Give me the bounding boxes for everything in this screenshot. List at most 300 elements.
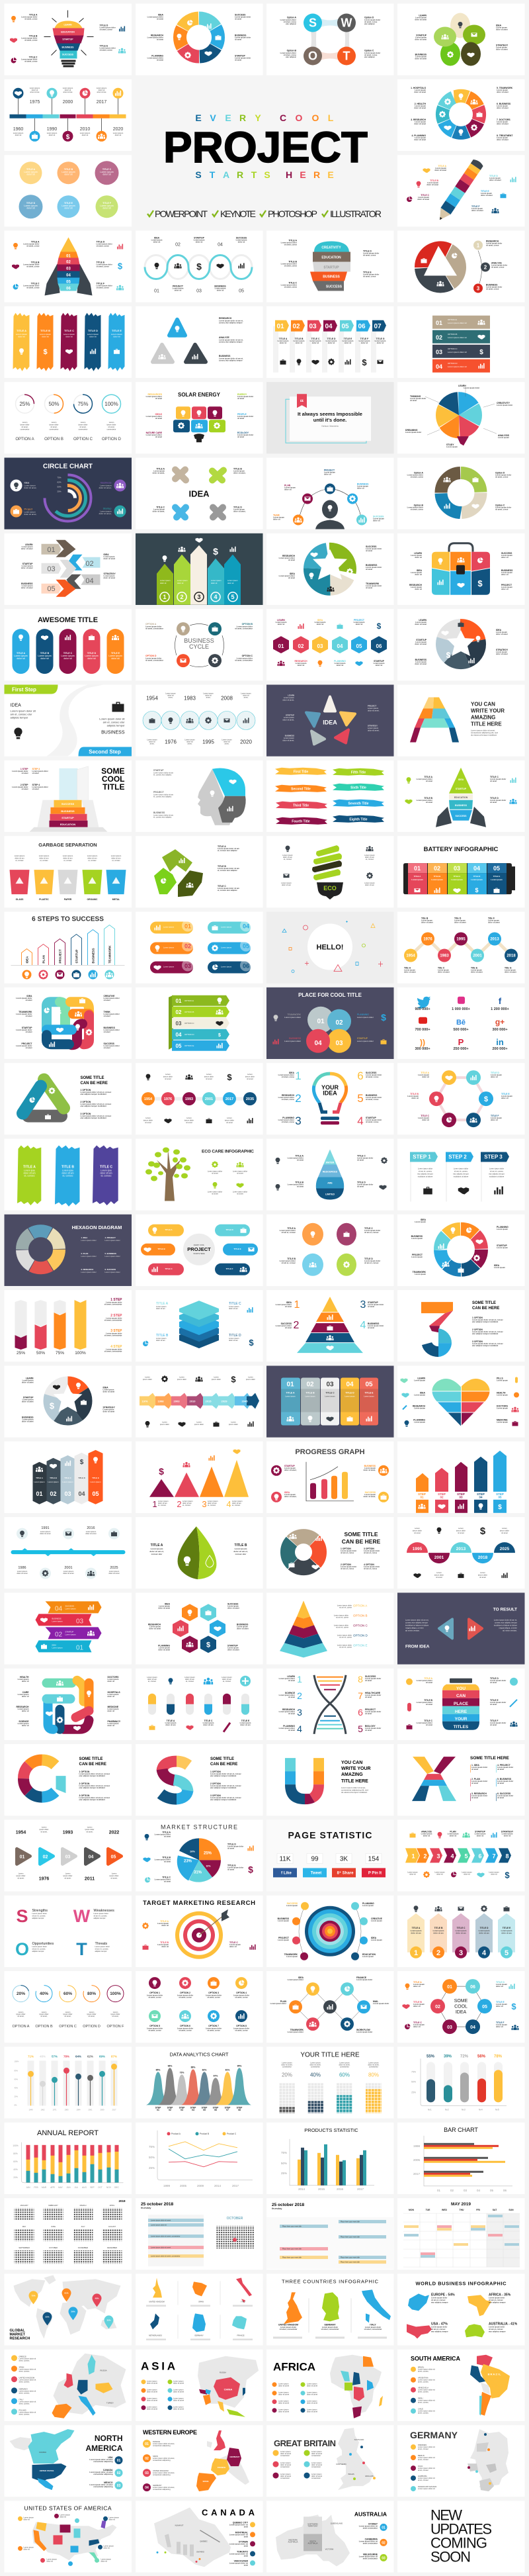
labels: TITLE C bbox=[288, 282, 297, 285]
numbers: 4 bbox=[297, 1724, 302, 1734]
labels: IDEA bbox=[421, 1219, 426, 1221]
steps: 01 bbox=[157, 2109, 159, 2111]
month: OCTOBER bbox=[227, 2217, 243, 2221]
heading: AUSTRALIA bbox=[354, 2510, 387, 2517]
values: consectetur bbox=[20, 428, 30, 431]
callouts: Lorem ipsum bbox=[24, 2516, 34, 2518]
options: Lorem ipsum dolor sit am et, consec bbox=[210, 1772, 241, 1775]
panel: timeline 1960-2020 bbox=[4, 79, 132, 151]
text: incididunt ut labore et dolore bbox=[405, 1624, 429, 1626]
labels: TITLE B bbox=[424, 797, 432, 800]
labels: dolor sit amet bbox=[103, 1410, 114, 1412]
legend: amet, consec bbox=[19, 2370, 30, 2373]
heading: IDEA bbox=[188, 488, 210, 499]
labels: TITLE C bbox=[102, 168, 111, 171]
panel: data analytics chart bbox=[136, 2047, 263, 2119]
text bbox=[411, 1927, 512, 1934]
text: incididunt ut labore bbox=[454, 1175, 469, 1178]
numbers: 02 bbox=[306, 1381, 314, 1389]
legend: Lorem ipsum bbox=[147, 2389, 157, 2391]
panel: line chart bbox=[136, 2123, 263, 2194]
legend: dolor sit amet bbox=[280, 2475, 291, 2477]
labels: dolor sit amet bbox=[454, 921, 466, 924]
nodes bbox=[292, 1902, 368, 1960]
years: Lorem ipsum bbox=[109, 1571, 119, 1573]
labels: Lorem ipsum bbox=[324, 471, 335, 474]
labels: dolor sit bbox=[504, 1834, 510, 1837]
arrow labels: TEAMWORK bbox=[108, 945, 111, 964]
side labels: Lorem ipsum dolor bbox=[284, 1016, 301, 1019]
axes and months: FEB bbox=[34, 2186, 38, 2189]
labels: UNITED KINGDOM bbox=[278, 2323, 298, 2326]
text: consec etur adipisic tempor bbox=[405, 1621, 428, 1624]
labels: sit am et, consec bbox=[281, 1231, 296, 1234]
chain bbox=[429, 1070, 493, 1127]
year circles bbox=[404, 932, 518, 962]
circle bbox=[307, 924, 352, 970]
labels: Lorem ipsum bbox=[434, 1871, 445, 1873]
labels: TITLE C bbox=[100, 1165, 112, 1169]
tags bbox=[4, 684, 132, 756]
labels: Lorem ipsum bbox=[497, 1420, 508, 1423]
labels: et, consec bbox=[232, 1504, 241, 1506]
titles: TITLE B bbox=[50, 1477, 57, 1479]
text: ad minim veniam. bbox=[405, 1629, 420, 1632]
years bbox=[142, 1399, 248, 1403]
values: 73% bbox=[180, 2071, 184, 2074]
values: ipsum dolor bbox=[79, 424, 88, 426]
labels: Lorem ipsum bbox=[103, 1408, 114, 1411]
text: Lorem ipsum dolor bbox=[104, 1239, 120, 1242]
labels: Lorem ipsum bbox=[427, 181, 439, 184]
side labels: TEAMWORK bbox=[287, 1013, 302, 1016]
labels: Lorem ipsum dolor bbox=[16, 1013, 32, 1015]
labels: sit amet bbox=[365, 1696, 372, 1698]
labels: dolor sit bbox=[501, 556, 509, 559]
icons bbox=[288, 1534, 322, 1569]
labels bbox=[281, 846, 376, 886]
labels: OPTION A bbox=[13, 2025, 30, 2029]
years: dolor sit bbox=[224, 740, 230, 743]
labels: sit amet, conse bbox=[284, 21, 297, 23]
icons and labels: TITLE A bbox=[29, 13, 37, 16]
labels: 4 bbox=[226, 1499, 231, 1509]
arrow tags bbox=[273, 320, 386, 373]
numbers: 01 bbox=[286, 1381, 294, 1389]
pills bbox=[12, 629, 124, 674]
labels: BUSINESS bbox=[364, 1465, 376, 1467]
tags: STEP 3 bbox=[484, 1154, 503, 1160]
labels: Lorem ipsum dolor sit am bbox=[153, 813, 174, 816]
options: Lorem ipsum dolor sit am et, consec bbox=[79, 1796, 110, 1799]
drop: ARE bbox=[327, 1182, 333, 1185]
labels: Lorem ipsum dolor bbox=[407, 506, 423, 508]
year circles: 1995 bbox=[456, 937, 466, 941]
labels: TITLE A bbox=[23, 1165, 36, 1169]
legend: dolor sit amet bbox=[147, 2408, 157, 2411]
panel: knot square bbox=[4, 988, 132, 1059]
labels: Lorem ipsum bbox=[413, 2003, 425, 2005]
labels: sit amet bbox=[237, 436, 244, 438]
percentages: 20% bbox=[282, 2072, 292, 2078]
labels: TITLE B bbox=[410, 1093, 419, 1095]
legend bbox=[11, 2355, 36, 2416]
arrow labels: PLAN bbox=[42, 955, 45, 964]
labels: IDEA bbox=[103, 553, 109, 556]
labels: BUSINESS bbox=[501, 569, 512, 572]
text: Lorem ipsum dolor bbox=[81, 1271, 97, 1273]
labels: TITLE F bbox=[491, 1115, 499, 1117]
heading: RESEARCH bbox=[9, 2336, 30, 2340]
letters bbox=[15, 1906, 91, 1959]
labels: dolor sit bbox=[22, 1710, 29, 1712]
icons bbox=[439, 93, 483, 136]
options: Lorem ipsum dolor sit am et, consec bbox=[81, 1091, 112, 1093]
labels: TITLE B bbox=[233, 467, 242, 470]
labels: sit amet bbox=[227, 1868, 234, 1870]
labels: 6. BUSINESS bbox=[497, 103, 510, 105]
labels: sit amet bbox=[288, 576, 295, 579]
labels: OPTION C bbox=[59, 2025, 77, 2029]
percentages: 60% bbox=[339, 2072, 350, 2078]
month grids bbox=[15, 2208, 122, 2264]
labels: dolor sit amet bbox=[237, 1627, 249, 1630]
legend: dolor sit amet bbox=[307, 2402, 317, 2405]
legend: VANCOUVER bbox=[234, 2559, 248, 2562]
legend: dolor sit amet bbox=[147, 2382, 157, 2385]
label text: Lorem ipsum bbox=[498, 436, 509, 439]
labels: Lorem ipsum dolor bbox=[288, 1157, 304, 1160]
column labels: Lorem ipsum bbox=[294, 340, 305, 342]
row text bbox=[282, 2221, 360, 2264]
labels: sit am et, consec bbox=[94, 1914, 107, 1917]
labels: Lorem bbox=[65, 2011, 70, 2013]
numbers: 2 bbox=[295, 1092, 302, 1105]
legend: GERMANY bbox=[153, 2485, 162, 2487]
axis labels: 2017 bbox=[232, 2184, 239, 2187]
legend: dolor sit amet bbox=[311, 2475, 322, 2477]
panel: 3D pyramid bbox=[266, 1592, 394, 1665]
arrow tags: 07 bbox=[374, 323, 382, 330]
labels: Lorem ipsum dolor bbox=[366, 584, 382, 587]
step labels: Lorem ipsum dolor bbox=[32, 786, 48, 788]
labels: Lorem ipsum dolor bbox=[368, 1303, 384, 1306]
years: dolor sit bbox=[32, 89, 38, 91]
axis labels: №1 bbox=[428, 2108, 432, 2111]
labels: Lorem bbox=[162, 1422, 167, 1423]
titles: TITLE E bbox=[92, 1477, 99, 1479]
callouts: Lorem ipsum bbox=[24, 2546, 34, 2548]
blobs bbox=[19, 161, 119, 218]
legend: amet, consec bbox=[19, 2381, 30, 2383]
labels: sit am et, conse bbox=[339, 1645, 352, 1648]
labels: Lorem ipsum bbox=[63, 333, 75, 336]
icons and labels: Lorem ipsum dolor bbox=[97, 285, 112, 287]
weekdays: MON bbox=[409, 2209, 415, 2211]
heading: UNITED STATES OF AMERICA bbox=[24, 2505, 112, 2511]
options: sit amet bbox=[471, 1782, 478, 1784]
labels: dolor sit bbox=[113, 335, 120, 338]
map: SOUTH bbox=[309, 2540, 316, 2542]
labels: dolor sit amet bbox=[415, 623, 427, 625]
panel: annual report bbox=[4, 2123, 132, 2194]
arrows: 02 bbox=[176, 1009, 182, 1015]
text blocks: BUSINESS bbox=[101, 731, 125, 735]
labels: SUCCESS bbox=[501, 552, 512, 555]
labels: Lorem ipsum bbox=[24, 205, 38, 207]
cell text: TITLE D bbox=[473, 875, 480, 878]
center oval bbox=[183, 1234, 215, 1265]
titles bbox=[34, 1477, 101, 1483]
labels: dolor sit am et, bbox=[149, 1550, 164, 1553]
rocket: EDUCATION bbox=[454, 796, 468, 799]
icons and labels: sit amet, conse bbox=[97, 265, 109, 267]
dividers bbox=[309, 2298, 351, 2332]
years: dolor sit amet bbox=[40, 1532, 51, 1535]
labels: Lorem ipsum bbox=[18, 1678, 29, 1680]
pencil bbox=[435, 158, 484, 223]
labels: et, consec bbox=[40, 859, 48, 862]
panel: infinity nodes bbox=[266, 1971, 394, 2043]
labels: IDEA bbox=[158, 13, 163, 16]
legend bbox=[272, 2450, 322, 2479]
labels: Lorem ipsum dolor bbox=[365, 1694, 381, 1696]
percent labels: 78% bbox=[63, 2054, 69, 2058]
labels: PROJECT bbox=[278, 1937, 289, 1939]
labels: dolor sit amet bbox=[438, 970, 450, 973]
labels: sit amet bbox=[227, 1847, 234, 1849]
labels: dolor sit am bbox=[185, 1678, 195, 1680]
labels: dolor sit amet bbox=[103, 557, 115, 560]
labels: TITLE C bbox=[156, 506, 165, 508]
labels: Lorem ipsum dolor bbox=[365, 1710, 381, 1713]
panel: horizontal bar chart bbox=[397, 2123, 525, 2194]
legend: amet consectetur bbox=[363, 2526, 378, 2529]
heading: AMAZING bbox=[341, 1772, 363, 1777]
labels: ipsum dolor bbox=[204, 1076, 214, 1078]
values: 20% bbox=[17, 1992, 25, 1996]
options: Lorem ipsum dolor bbox=[341, 1565, 356, 1568]
options: etur adipisic tempor incididunt bbox=[472, 1332, 498, 1335]
base bbox=[321, 1117, 339, 1125]
labels: BUSINESS bbox=[21, 582, 33, 585]
legend: UNITED KINGDOM bbox=[19, 2377, 34, 2379]
door and stairs: EDUCATION bbox=[60, 823, 75, 826]
labels: Lorem ipsum bbox=[103, 1389, 114, 1391]
axes and months: NOV bbox=[106, 2186, 112, 2189]
date heading: 25 october 2018 bbox=[141, 2202, 173, 2207]
icons and text: IDEA bbox=[52, 1643, 56, 1646]
legend: DRESDEN bbox=[418, 2444, 427, 2446]
labels: dolor sit bbox=[26, 173, 35, 176]
labels: IDEA bbox=[286, 1301, 292, 1304]
battery: 02 bbox=[434, 865, 440, 872]
circles: 2035 bbox=[246, 1097, 254, 1101]
labels: OPTION 2 bbox=[180, 1992, 190, 1994]
labels: sit amet, bbox=[88, 2015, 95, 2017]
legend: Lorem ipsum dolor sit amet, bbox=[153, 2486, 175, 2489]
arrows: 1 bbox=[163, 594, 167, 600]
labels: sit am et, consec bbox=[431, 2328, 446, 2330]
labels: Lorem ipsum bbox=[502, 1832, 513, 1835]
domes: 2001 bbox=[434, 1555, 444, 1560]
labels: Lorem ipsum bbox=[368, 727, 379, 729]
labels: IDEA bbox=[165, 1602, 170, 1605]
labels: ANALYZE bbox=[219, 336, 229, 339]
panel: chevrons bbox=[4, 533, 132, 605]
battery: 05 bbox=[493, 865, 500, 872]
labels: Lorem ipsu bbox=[62, 1169, 73, 1172]
axis labels: 05 bbox=[490, 2189, 494, 2192]
icons and text: Lorem ipsum bbox=[163, 946, 175, 949]
legend: Lorem ipsum bbox=[278, 2383, 289, 2385]
labels: sit amet bbox=[490, 801, 497, 804]
icons and text: dolor sit amet, bbox=[99, 512, 112, 515]
labels: consec etur adipisic tempor bbox=[219, 340, 243, 343]
labels: STARTUP bbox=[416, 34, 427, 37]
labels: Option A bbox=[414, 471, 423, 474]
icons bbox=[278, 621, 382, 667]
ribbon rows: 02 bbox=[436, 334, 442, 341]
panel: SWOT letters bbox=[4, 1896, 132, 1967]
labels: Lorem ipsum bbox=[362, 1904, 374, 1907]
options: 1 OPTION bbox=[79, 1771, 89, 1773]
text: incididunt ut labore bbox=[489, 1175, 505, 1178]
options: 3 OPTION bbox=[210, 1794, 221, 1797]
labels: dolor sit bbox=[161, 1945, 169, 1948]
labels: etur adipisic tempor bbox=[431, 2301, 448, 2303]
labels bbox=[23, 1165, 112, 1177]
pins bbox=[13, 88, 123, 142]
options: Lorem ipsum dolor sit am et, consec bbox=[472, 1342, 503, 1345]
labels: Lorem ipsum dolor bbox=[364, 52, 380, 54]
icons and labels: TITLE E bbox=[99, 45, 108, 48]
labels: et, consec etur adipisic bbox=[218, 869, 237, 872]
labels: 3 bbox=[202, 1499, 207, 1509]
values bbox=[15, 401, 122, 441]
panel: water drop bbox=[266, 1138, 394, 1211]
legend: Lorem ipsum dolor sit amet bbox=[89, 2483, 113, 2486]
percent labels: 48% bbox=[40, 2054, 46, 2058]
icons and text: Project bbox=[24, 507, 33, 511]
labels: Lorem ipsum bbox=[18, 1693, 29, 1696]
labels: sit amet bbox=[414, 1532, 421, 1534]
labels: Lorem ipsum bbox=[497, 120, 508, 123]
left brushes: Fourth Title bbox=[292, 819, 310, 823]
legend bbox=[411, 2444, 436, 2491]
legend: Lorem ipsum dolor sit amet, bbox=[153, 2457, 175, 2460]
bars bbox=[15, 1300, 86, 1350]
legend: amet bbox=[244, 2563, 248, 2566]
chevron rows: 02 bbox=[85, 560, 94, 568]
map: SPAIN bbox=[203, 2480, 208, 2483]
icons and labels: Lorem ipsum dolor bbox=[23, 285, 40, 287]
numbers bbox=[36, 1491, 99, 1497]
step labels: Lorem ipsum dolor bbox=[12, 786, 28, 788]
legend: Lorem ipsum dolor sit bbox=[418, 2379, 435, 2381]
labels: sit amet, conse bbox=[363, 254, 376, 257]
legend bbox=[411, 2366, 435, 2415]
labels bbox=[413, 1527, 509, 1579]
legend bbox=[359, 2522, 387, 2561]
icons and text: STARTUP bbox=[65, 1630, 73, 1633]
labels: sit amet, conse bbox=[148, 1996, 161, 1999]
numbers: 7 bbox=[492, 1853, 496, 1859]
legend: Lorem ipsum bbox=[147, 2381, 157, 2383]
axis labels: 2017 bbox=[357, 2187, 364, 2191]
labels: TITLE D bbox=[490, 797, 499, 800]
chevron rows: 04 bbox=[85, 577, 94, 585]
legend: Lorem ipsum dolor sit bbox=[418, 2368, 435, 2371]
jar: PLACE bbox=[454, 1702, 469, 1706]
map: ONTARIO bbox=[196, 2550, 204, 2553]
values: OPTION A bbox=[15, 437, 34, 441]
panel: six pills bbox=[136, 912, 263, 984]
labels: NATURE CARE bbox=[146, 432, 163, 434]
titles: TITLE A bbox=[36, 1477, 43, 1479]
chart bbox=[441, 473, 481, 512]
labels: ipsum dolor bbox=[17, 2013, 26, 2015]
labels: DOCTORS bbox=[497, 1404, 508, 1407]
labels: Lorem ipsum dolor bbox=[357, 1157, 373, 1160]
labels bbox=[16, 329, 123, 356]
heading: WRITE YOUR bbox=[341, 1767, 371, 1771]
icons: $ bbox=[80, 1459, 84, 1466]
labels: Lorem ipsum bbox=[22, 1398, 34, 1401]
icons and labels: Lorem ipsum dolor bbox=[21, 37, 37, 40]
panel: DNA bbox=[266, 1669, 394, 1740]
labels: Lorem bbox=[113, 2011, 118, 2013]
labels bbox=[280, 16, 380, 58]
step numbers: 03 bbox=[76, 1618, 83, 1625]
labels: Lorem ipsum bbox=[111, 333, 123, 336]
panel: new updates coming soon bbox=[397, 2501, 525, 2573]
month names: NOVEMBER bbox=[78, 2246, 88, 2249]
legend: 03 bbox=[382, 2556, 386, 2560]
panel: arrow list bbox=[136, 988, 263, 1059]
arrows: 3 bbox=[197, 594, 201, 600]
map: CHINA bbox=[224, 2388, 232, 2391]
values: 80% bbox=[87, 1992, 96, 1996]
labels: STRATEGY bbox=[496, 649, 508, 651]
arrows: 5 bbox=[231, 594, 235, 600]
brushes bbox=[13, 313, 124, 371]
labels: 2 bbox=[177, 1499, 182, 1509]
counters bbox=[277, 1853, 382, 1863]
labels bbox=[148, 1602, 249, 1651]
options: sit amet bbox=[497, 1796, 504, 1799]
numbers bbox=[411, 1853, 509, 1859]
icons and text: Lorem ipsum dolor bbox=[208, 1170, 222, 1173]
icons and text bbox=[153, 925, 232, 970]
years: Lorem ipsum bbox=[97, 87, 106, 89]
step labels: Lorem ipsum dolor bbox=[12, 770, 28, 772]
labels: dolor sit bbox=[65, 335, 73, 338]
labels: sit amet bbox=[237, 417, 244, 420]
legend: Lorem ipsum dolor sit bbox=[19, 2368, 36, 2371]
pill text: dolor sit bbox=[40, 657, 49, 660]
labels: dolor sit amet bbox=[22, 1401, 34, 1403]
column labels: dolor sit bbox=[312, 342, 319, 344]
pill text: TITLE E bbox=[111, 652, 120, 655]
legend: POLAND bbox=[19, 2410, 26, 2412]
labels: Lorem ipsum dolor sit bbox=[448, 365, 467, 368]
labels: dolor sit amet bbox=[471, 970, 483, 973]
labels: dolor sit am bbox=[23, 1172, 36, 1174]
pill text: Lorem ipsum bbox=[61, 655, 75, 657]
options: Lorem ipsum dolor sit am et, consec bbox=[472, 1330, 503, 1333]
buttons: Tweet bbox=[311, 1871, 321, 1875]
